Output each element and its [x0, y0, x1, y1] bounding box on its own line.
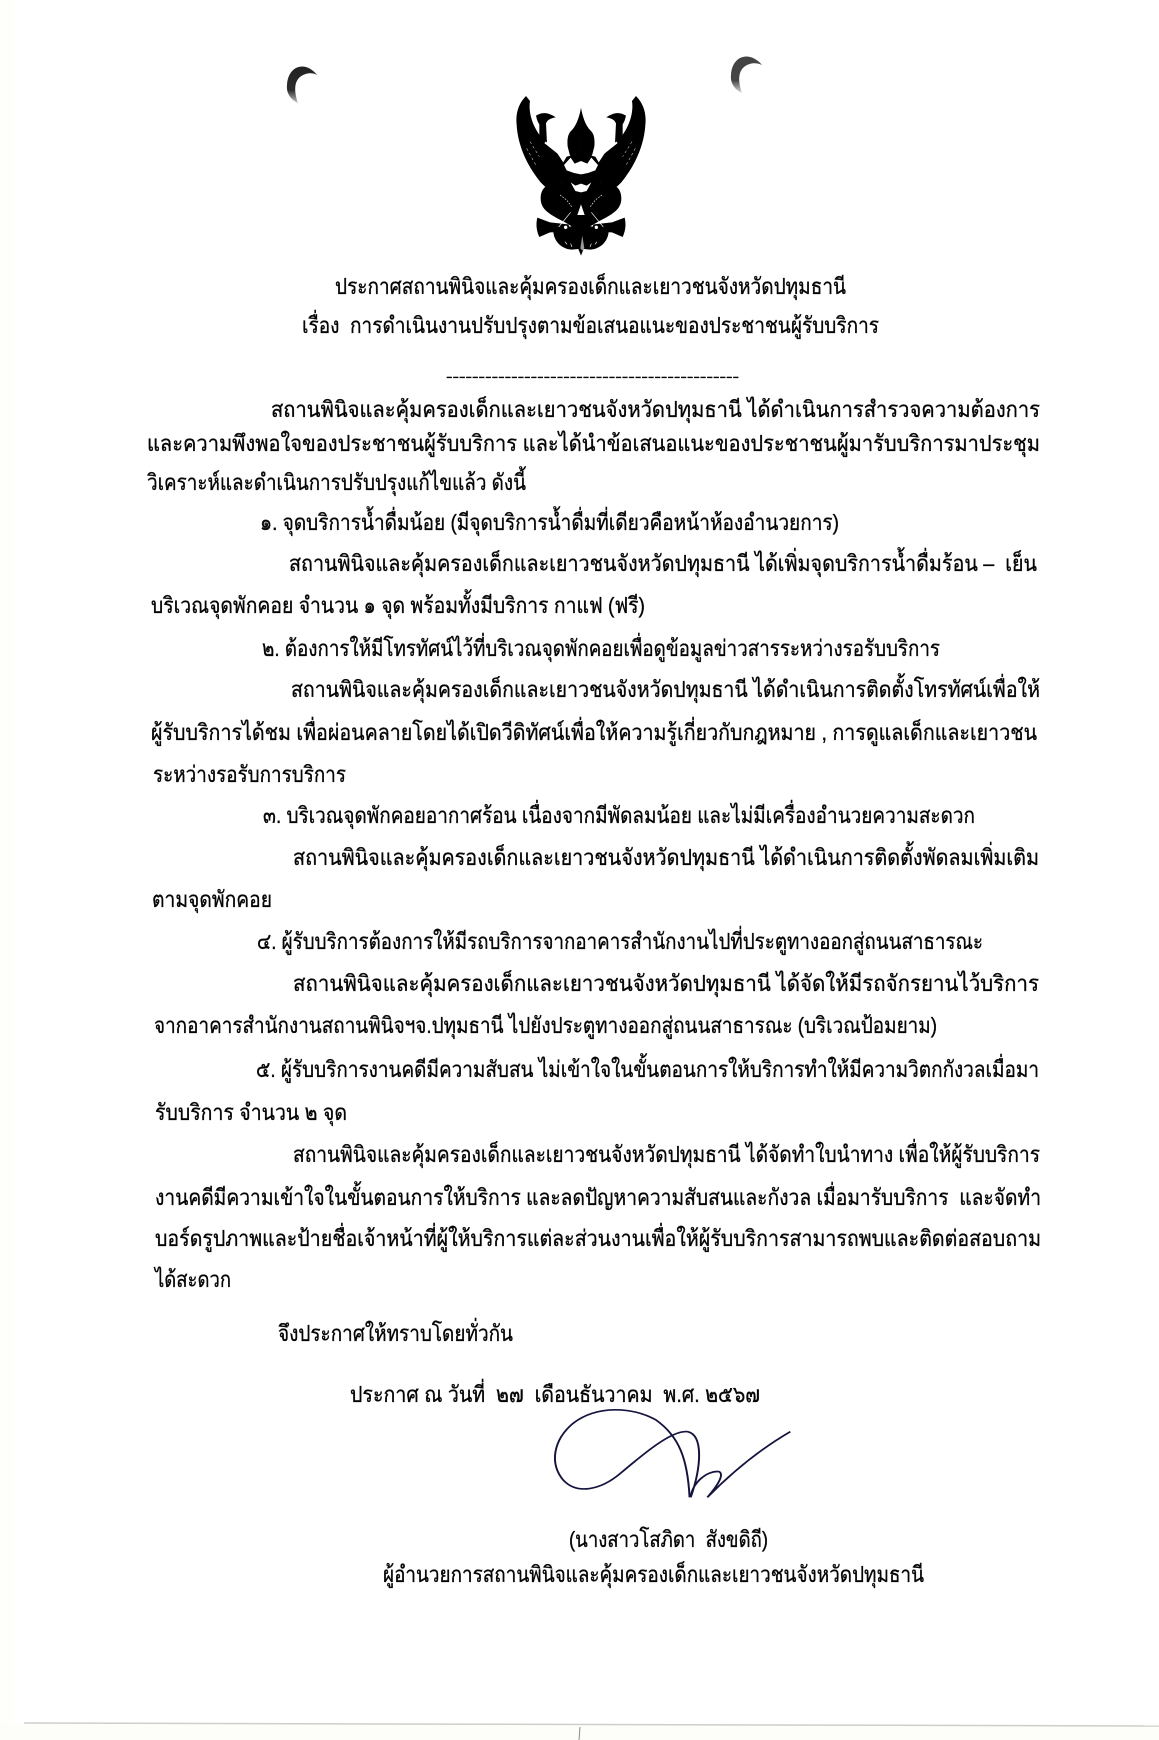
- signature: [555, 1410, 790, 1497]
- title: เรื่อง การดำเนินงานปรับปรุงตามข้อเสนอแนะของประชาชนผู้รับบริการ: [302, 309, 879, 339]
- text block: item 5: ๕. ผู้รับบริการงานคดีมีความสับสน ไม่เข้าใจในขั้นตอนการให้บริการทำให้มีความวิตกกังวลเมื่อมา: [256, 1053, 1039, 1083]
- closing statement: จึงประกาศให้ทราบโดยทั่วกัน: [278, 1317, 513, 1346]
- text block: item 4: ๔. ผู้รับบริการต้องการให้มีรถบริการจากอาคารสำนักงานไปที่ประตูทางออกสู่ถนนสาธารณะ: [257, 925, 983, 955]
- text block: item 4: จากอาคารสำนักงานสถานพินิจฯจ.ปทุมธานี ไปยังประตูทางออกสู่ถนนสาธารณะ (บริเวณป้อมยาม): [154, 1012, 937, 1039]
- icon: Garuda emblem: [516, 96, 646, 256]
- text block: item 2: ผู้รับบริการได้ชม เพื่อผ่อนคลายโดยได้เปิดวีดิทัศน์เพื่อให้ความรู้เกี่ยวกับกฎหมาย , การดูแลเด็กและเยาวชน: [151, 716, 1037, 746]
- title: [302, 272, 879, 339]
- text block: introduction: [147, 395, 1040, 496]
- text block: item 1: สถานพินิจและคุ้มครองเด็กและเยาวชนจังหวัดปทุมธานี ได้เพิ่มจุดบริการน้ำดื่มร้อน – เย็น: [289, 547, 1037, 577]
- date line: ประกาศ ณ วันที่ ๒๗ เดือนธันวาคม พ.ศ. ๒๕๖๗: [350, 1378, 760, 1407]
- text block: item 2: ระหว่างรอรับการบริการ: [153, 762, 346, 787]
- text block: item 2: สถานพินิจและคุ้มครองเด็กและเยาวชนจังหวัดปทุมธานี ได้ดำเนินการติดตั้งโทรทัศน์เพื่อให้: [291, 673, 1040, 703]
- signatory name: (นางสาวโสภิดา สังขดิถี): [569, 1526, 768, 1552]
- text block: item 2: [151, 632, 1040, 787]
- text block: item 5: ได้สะดวก: [153, 1266, 231, 1292]
- text block: item 3: [152, 799, 1039, 913]
- text block: item 2: ๒. ต้องการให้มีโทรทัศน์ไว้ที่บริเวณจุดพักคอยเพื่อดูข้อมูลข่าวสารระหว่างรอรับบริการ: [262, 632, 940, 662]
- text block: item 5: บอร์ดรูปภาพและป้ายชื่อเจ้าหน้าที่ผู้ให้บริการแต่ละส่วนงานเพื่อให้ผู้รับบริการสามารถพบและติดต่อสอบถาม: [155, 1222, 1041, 1252]
- text block: item 5: สถานพินิจและคุ้มครองเด็กและเยาวชนจังหวัดปทุมธานี ได้จัดทำใบนำทาง เพื่อให้ผู้รับบริการ: [293, 1138, 1040, 1168]
- icon: right punch hole mark: [731, 57, 762, 93]
- text block: item 5: [153, 1053, 1041, 1292]
- icon: left punch hole mark: [287, 67, 317, 103]
- text block: item 3: ตามจุดพักคอย: [152, 887, 272, 913]
- text block: item 5: รับบริการ จำนวน ๒ จุด: [155, 1100, 347, 1126]
- text block: item 3: ๓. บริเวณจุดพักคอยอากาศร้อน เนื่องจากมีพัดลมน้อย และไม่มีเครื่องอำนวยความสะดวก: [263, 799, 975, 829]
- dashed divider text: ---------------------------------------------: [446, 368, 739, 384]
- text block: introduction: วิเคราะห์และดำเนินการปรับปรุงแก้ไขแล้ว ดังนี้: [147, 466, 526, 496]
- text block: item 3: สถานพินิจและคุ้มครองเด็กและเยาวชนจังหวัดปทุมธานี ได้ดำเนินการติดตั้งพัดลมเพิ่มเติม: [293, 841, 1039, 871]
- text block: item 4: สถานพินิจและคุ้มครองเด็กและเยาวชนจังหวัดปทุมธานี ได้จัดให้มีรถจักรยานไว้บริการ: [293, 969, 1039, 997]
- title: ประกาศสถานพินิจและคุ้มครองเด็กและเยาวชนจังหวัดปทุมธานี: [335, 272, 846, 300]
- text block: item 1: บริเวณจุดพักคอย จำนวน ๑ จุด พร้อมทั้งมีบริการ กาแฟ (ฟรี): [151, 589, 645, 619]
- text block: item 1: ๑. จุดบริการน้ำดื่มน้อย (มีจุดบริการน้ำดื่มที่เดียวคือหน้าห้องอำนวยการ): [260, 506, 839, 536]
- text block: item 4: [154, 925, 1039, 1039]
- text block: introduction: สถานพินิจและคุ้มครองเด็กและเยาวชนจังหวัดปทุมธานี ได้ดำเนินการสำรวจความต้องการ: [271, 395, 1040, 423]
- text block: introduction: และความพึงพอใจของประชาชนผู้รับบริการ และได้นำข้อเสนอแนะของประชาชนผู้มารับบริการมาประชุม: [147, 430, 1040, 457]
- text block: item 1: [151, 506, 1037, 619]
- signatory position: ผู้อำนวยการสถานพินิจและคุ้มครองเด็กและเยาวชนจังหวัดปทุมธานี: [383, 1560, 924, 1588]
